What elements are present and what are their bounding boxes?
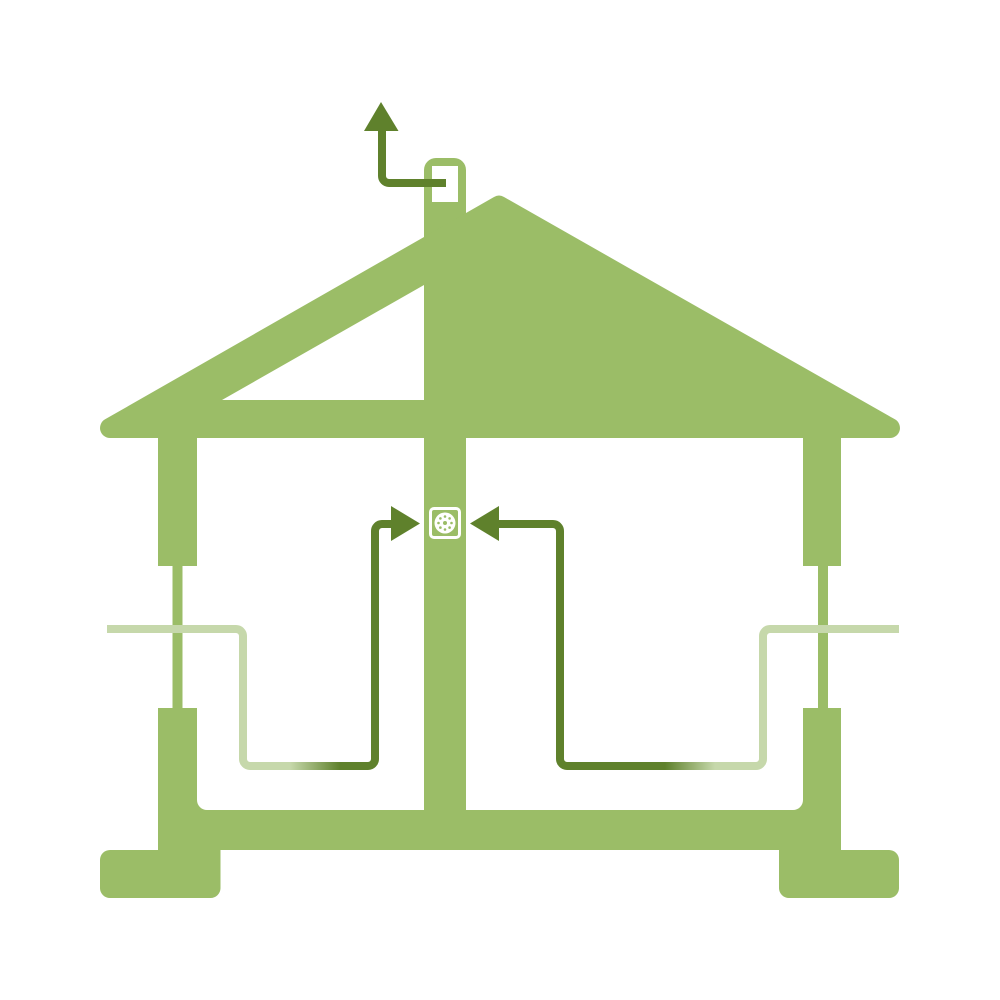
left window mullion [172, 560, 182, 715]
exhaust arrow through chimney [364, 102, 446, 183]
house structure [100, 158, 900, 898]
chimney [424, 158, 466, 260]
central column [424, 430, 466, 820]
left upper wall [158, 430, 197, 566]
roof [100, 196, 900, 438]
right window mullion [818, 560, 828, 715]
left foundation [100, 840, 220, 898]
left intake duct [107, 506, 420, 770]
right intake duct [470, 506, 899, 770]
right foundation [779, 840, 899, 898]
floor and lower walls [158, 708, 841, 850]
right upper wall [803, 430, 841, 566]
icon: ventilation fan [430, 508, 460, 538]
